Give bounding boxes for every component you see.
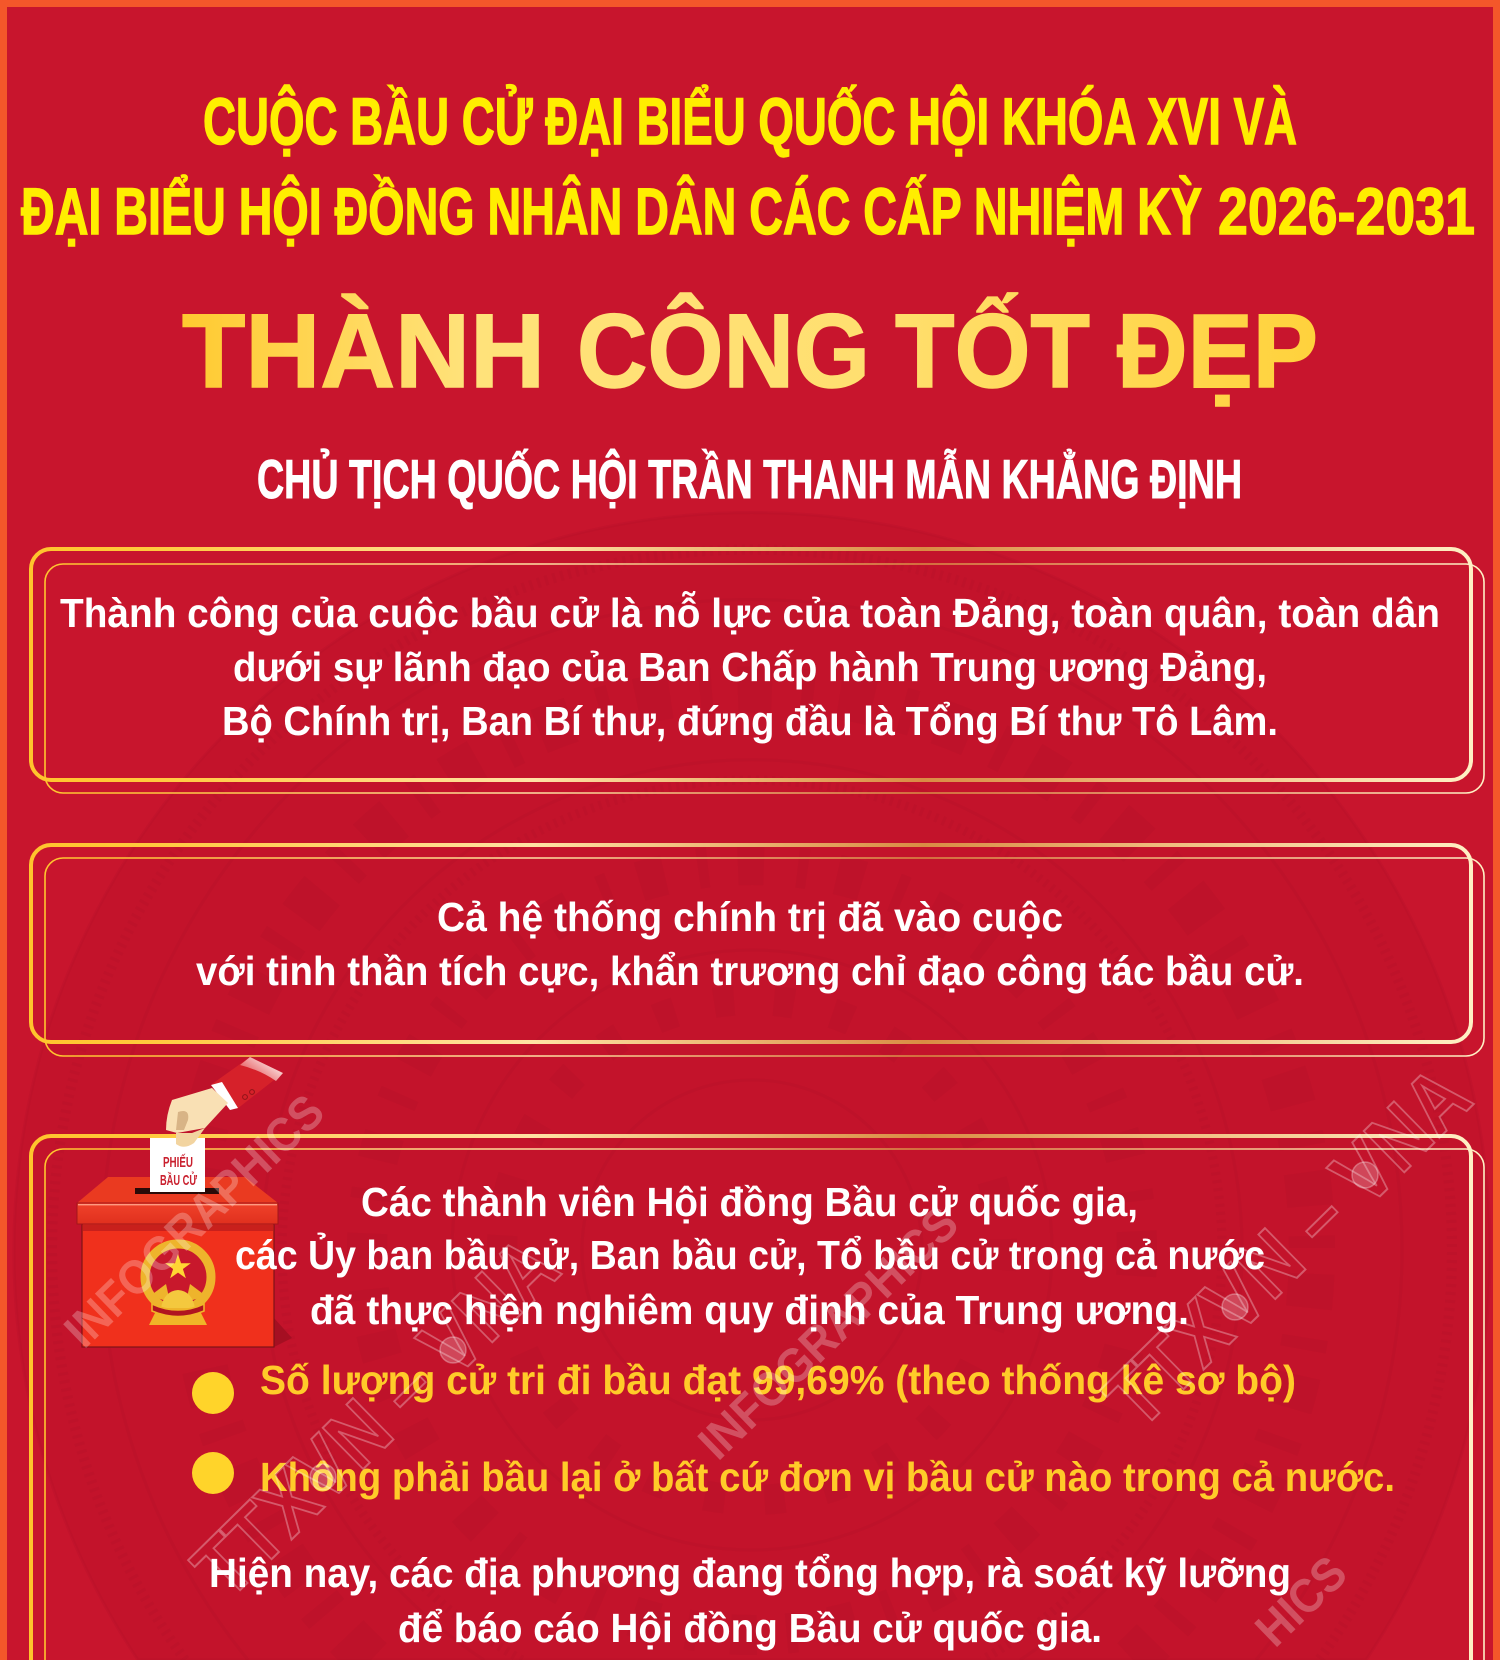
closing text — [209, 1550, 1291, 1651]
panel: statement 3 — [31, 1136, 1484, 1660]
box front — [82, 1224, 274, 1347]
headline: CÔNG — [577, 292, 870, 410]
ballot box lid top — [77, 1177, 278, 1203]
panel: statement 1 — [31, 549, 1484, 793]
watermark globes — [310, 1162, 1378, 1490]
hand — [166, 1088, 228, 1133]
ballot paper — [150, 1138, 205, 1192]
statement 3 intro — [235, 1179, 1265, 1333]
headline: THÀNH — [182, 292, 545, 410]
icon: ballot box with hand — [77, 1057, 292, 1347]
box lid front — [77, 1203, 278, 1224]
icon: ballot box with hand: BẦU CỬ — [160, 1171, 197, 1189]
bullet: no re-vote: Không phải bầu lại ở bất cứ đơn vị bầu cử nào trong cả nước. — [260, 1454, 1395, 1500]
watermarks — [55, 1048, 1488, 1657]
statement 1 line 3: Bộ Chính trị, Ban Bí thư, đứng đầu là Tổng Bí thư Tô Lâm. — [222, 698, 1278, 744]
shirt cuff — [211, 1082, 238, 1110]
intro line 3: đã thực hiện nghiêm quy định của Trung ương. — [310, 1287, 1189, 1333]
statement 2 line 2: với tinh thần tích cực, khẩn trương chỉ đạo công tác bầu cử. — [196, 948, 1304, 994]
statement 2 line 1: Cả hệ thống chính trị đã vào cuộc — [437, 894, 1063, 940]
intro line 2: các Ủy ban bầu cử, Ban bầu cử, Tổ bầu cử trong cả nước — [235, 1232, 1265, 1278]
intro line 1: Các thành viên Hội đồng Bầu cử quốc gia, — [361, 1179, 1138, 1225]
watermark: infographics 2: INFOGRAPHICS — [689, 1197, 969, 1470]
statement 1 line 2: dưới sự lãnh đạo của Ban Chấp hành Trung ương Đảng, — [233, 644, 1267, 690]
title: two yellow lines — [21, 84, 1475, 248]
hand sleeve — [212, 1057, 283, 1109]
statement 1 line 1: Thành công của cuộc bầu cử là nỗ lực của toàn Đảng, toàn quân, toàn dân — [60, 590, 1440, 636]
watermark: infographics 1: INFOGRAPHICS — [55, 1085, 335, 1358]
panel: statement 2 — [31, 845, 1484, 1056]
box drop shadow — [274, 1318, 292, 1347]
watermark: TTXVN VNA 1: TTXVN – VNA — [175, 1218, 576, 1615]
headline: ĐẸP — [1117, 293, 1318, 410]
watermark: infographics 3: HICS — [1246, 1547, 1357, 1657]
ballot text: PHIẾU — [163, 1154, 193, 1171]
closing line 1: Hiện nay, các địa phương đang tổng hợp, rà soát kỹ lưỡng — [209, 1550, 1291, 1596]
closing line 2: để báo cáo Hội đồng Bầu cử quốc gia. — [398, 1605, 1102, 1651]
national emblem — [145, 1244, 211, 1325]
headline — [182, 292, 1318, 410]
thumb on ballot — [176, 1128, 205, 1147]
headline: TỐT — [895, 292, 1090, 410]
bullet: turnout: Số lượng cử tri đi bầu đạt 99,69% (theo thống kê sơ bộ) — [260, 1357, 1296, 1403]
background bronze drum pattern — [14, 513, 1490, 1660]
ballot slot — [135, 1188, 219, 1194]
